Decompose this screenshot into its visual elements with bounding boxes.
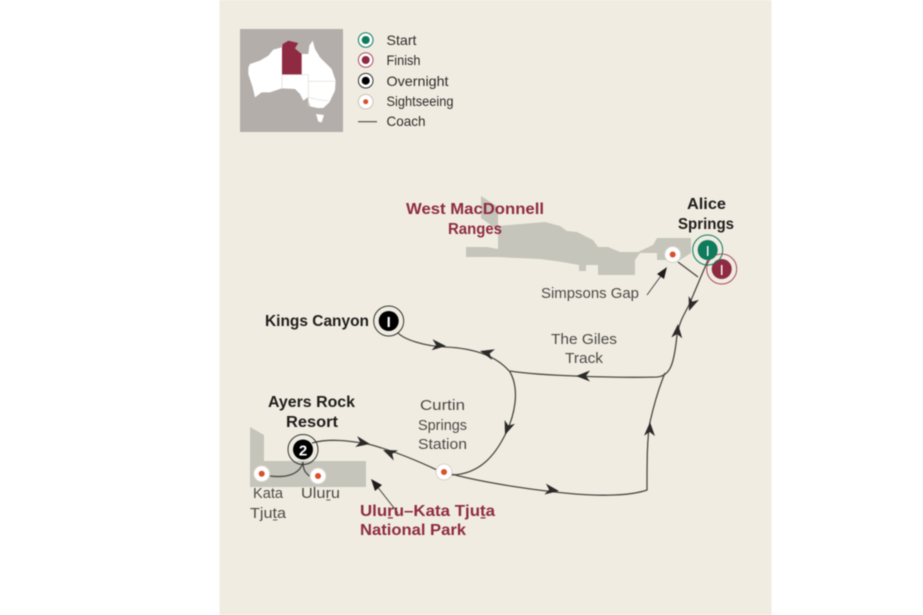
label: Curtin Springs Station: Station — [418, 436, 467, 453]
label: The Giles Track: Track — [565, 350, 604, 367]
marker: Kings Canyon — [374, 306, 404, 336]
label: West MacDonnell Ranges: Ranges — [448, 221, 502, 238]
legend: overnight: Overnight — [386, 73, 449, 89]
legend: sightseeing: Sightseeing — [386, 93, 454, 109]
marker: Simpsons Gap — [665, 246, 681, 262]
label: Ayers Rock Resort: Ayers Rock — [268, 394, 355, 411]
label: Curtin Springs Station: Springs — [418, 417, 467, 434]
marker: Alice Springs start: I — [706, 243, 710, 260]
region: Uluru-Kata Tjuta National Park — [250, 427, 366, 487]
inset map: Australia — [240, 29, 343, 132]
label: Uluru-Kata Tjuta National Park: Uluṟu–Kata Tjuṯa — [360, 503, 495, 520]
routes — [270, 260, 708, 495]
legend — [358, 32, 454, 129]
marker: Alice Springs start — [693, 235, 723, 265]
state borders — [282, 75, 336, 106]
legend: start: Start — [386, 32, 417, 48]
marker: Kata Tjuta — [254, 466, 270, 482]
label: Uluru: Uluṟu — [301, 485, 340, 502]
label: Curtin Springs Station: Curtin — [420, 397, 465, 414]
label: Kata Tjuta: Kata — [253, 485, 284, 502]
marker: Alice Springs finish: I — [720, 262, 724, 279]
marker: Alice Springs finish — [707, 254, 737, 284]
arrow: Simpsons Gap pointer — [647, 267, 667, 295]
label: Simpsons Gap: Simpsons Gap — [541, 285, 639, 302]
label: Kings Canyon: Kings Canyon — [265, 313, 369, 330]
Northern Territory highlight — [282, 41, 302, 75]
marker: Curtin Springs — [436, 464, 452, 480]
legend: coach: Coach — [386, 113, 426, 129]
marker: Uluru — [310, 468, 326, 484]
label: Kata Tjuta: Tjuṯa — [250, 505, 287, 522]
label: Ayers Rock Resort: Resort — [286, 414, 338, 431]
label: Uluru-Kata Tjuta National Park: National Park — [360, 522, 466, 539]
Tasmania — [316, 114, 324, 122]
label: Alice Springs: Springs — [678, 216, 734, 233]
Australia mainland — [248, 41, 336, 108]
route arrows — [355, 296, 699, 496]
label: Alice Springs: Alice — [687, 196, 726, 213]
marker: Kings Canyon: I — [387, 314, 391, 331]
panel: map background — [220, 0, 772, 615]
label: The Giles Track: The Giles — [551, 331, 617, 348]
legend: finish: Finish — [386, 52, 420, 68]
region: West MacDonnell Ranges — [466, 196, 691, 275]
label: West MacDonnell Ranges: West MacDonnell — [406, 201, 544, 218]
arrow: national park pointer — [371, 479, 398, 513]
marker: Ayers Rock Resort: 2 — [299, 442, 307, 460]
marker: Ayers Rock Resort — [288, 434, 318, 464]
